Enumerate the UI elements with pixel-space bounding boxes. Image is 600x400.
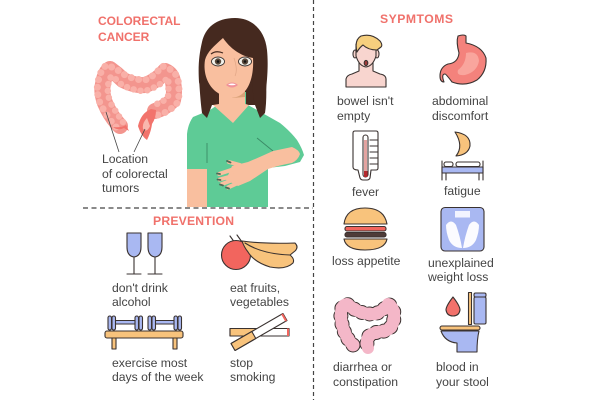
caption: diarrhea: constipation: [333, 375, 398, 389]
panel: colorectal cancer overview: [97, 14, 304, 207]
caption: bowel: empty: [337, 109, 371, 123]
hand and forearm: [217, 147, 300, 188]
panel: prevention: [105, 214, 297, 384]
illustration: colon with tumors: [97, 65, 179, 152]
icon: moon and bed: [442, 132, 483, 180]
heading: PREVENTION: [153, 214, 234, 228]
caption: exercise: exercise most: [112, 356, 187, 370]
heading: SYPMTOMS: [380, 12, 453, 26]
caption: blood: blood in: [436, 360, 479, 374]
caption: alcohol: don't drink: [112, 281, 168, 295]
caption: weight loss: unexplained: [428, 256, 494, 270]
caption: fatigue: fatigue: [444, 184, 481, 198]
hair strands: [199, 78, 266, 118]
icon: person bust: [346, 35, 386, 87]
caption: abdominal: discomfort: [432, 109, 489, 123]
caption: alcohol: alcohol: [112, 295, 151, 309]
icon: apple and bananas: [222, 235, 297, 270]
caption: weight loss: weight loss: [427, 270, 488, 284]
mouth: [226, 82, 238, 88]
icon: wine glasses: [127, 233, 162, 274]
caption: tumor location: Location: [102, 152, 148, 166]
caption: appetite: loss appetite: [332, 254, 401, 268]
icon: intestines: [341, 304, 394, 348]
caption: blood: your stool: [436, 375, 489, 389]
icon: burger: [344, 208, 387, 250]
title: CANCER: [98, 30, 150, 44]
caption: tumor location: of colorectal: [102, 167, 168, 181]
title: COLORECTAL: [98, 14, 180, 28]
caption: smoking: smoking: [230, 370, 275, 384]
caption: fruits: eat fruits,: [230, 281, 280, 295]
caption: tumor location: tumors: [102, 181, 139, 195]
panel: symptoms: [332, 12, 494, 389]
icon: dumbbells on bench: [105, 316, 183, 349]
eyes: [211, 52, 252, 76]
icon: crossed cigarettes: [230, 314, 289, 350]
caption: bowel: bowel isn't: [337, 94, 394, 108]
caption: fever: fever: [352, 185, 379, 199]
caption: fruits: vegetables: [230, 295, 289, 309]
icon: blood drop and toilet: [440, 292, 486, 352]
illustration: woman holding her abdomen: [187, 18, 304, 207]
caption: smoking: stop: [230, 356, 253, 370]
caption: exercise: days of the week: [112, 370, 204, 384]
icon: thermometer: [353, 131, 378, 180]
caption: diarrhea: diarrhea or: [333, 360, 392, 374]
caption: abdominal: abdominal: [432, 94, 488, 108]
icon: bathroom scale: [441, 208, 484, 251]
icon: stomach: [440, 35, 486, 84]
